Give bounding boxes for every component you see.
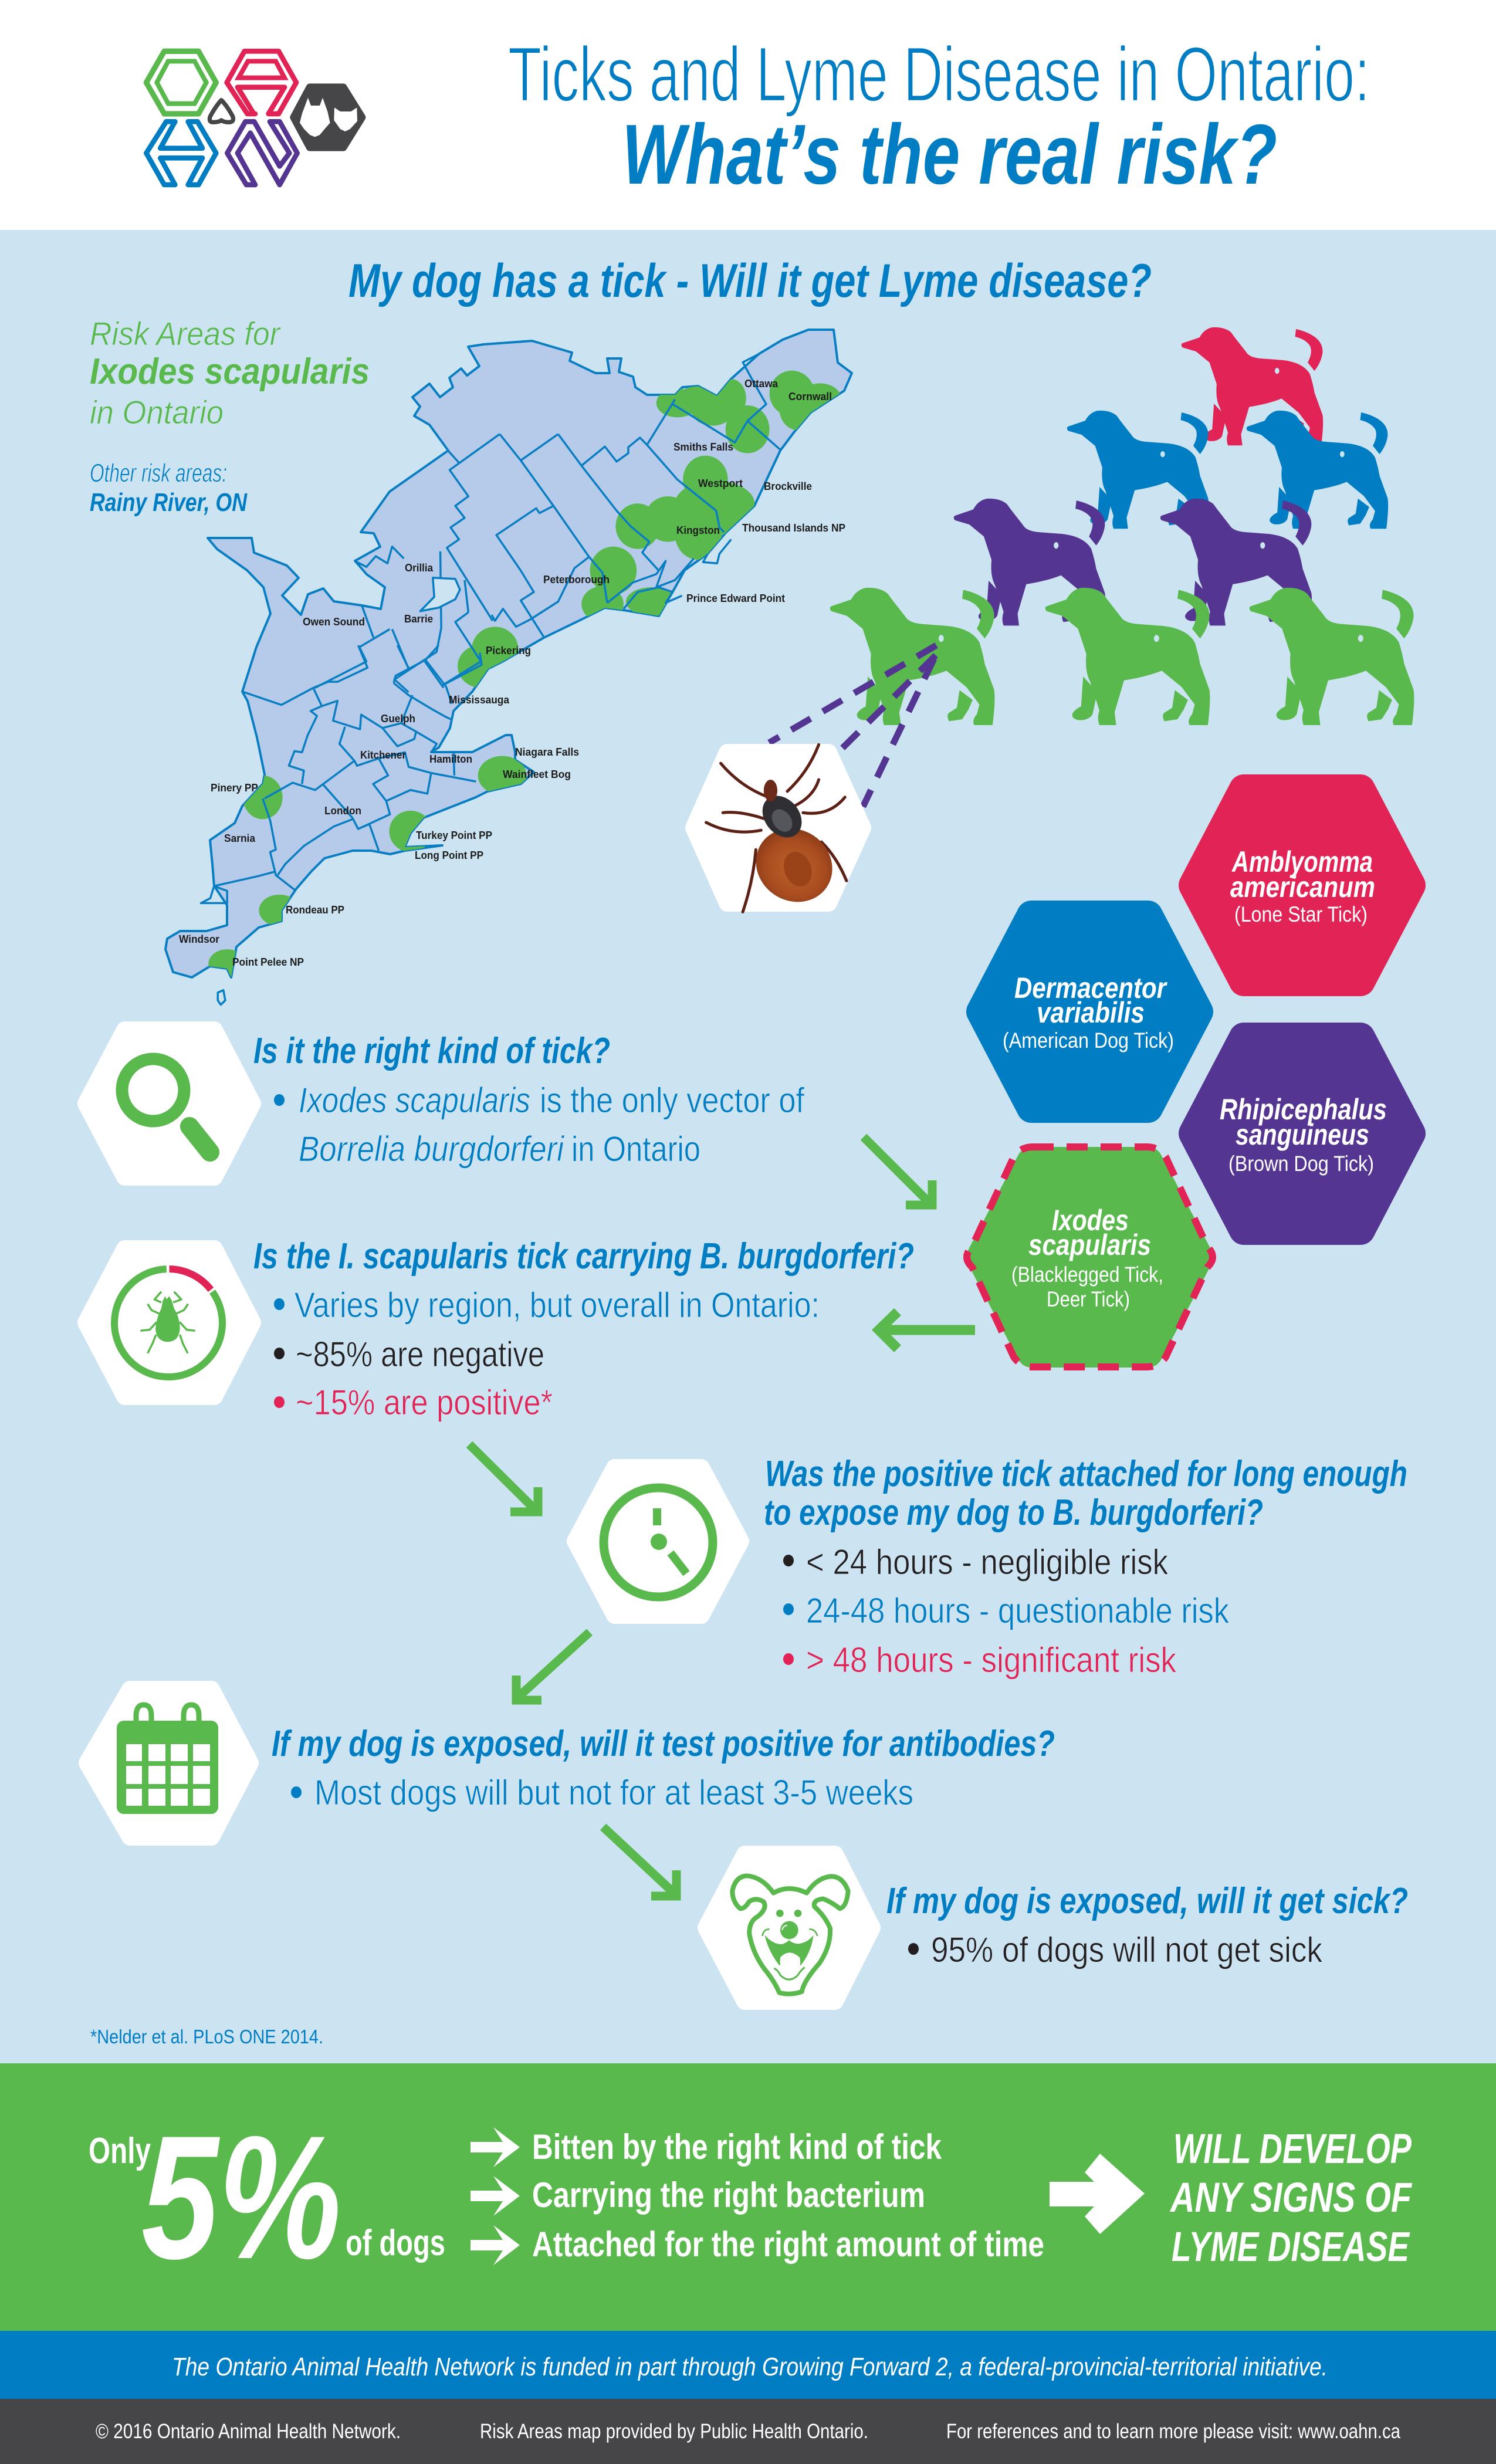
map: place labels: Wainfleet Bog xyxy=(503,769,571,780)
panel: dark footer xyxy=(0,2399,1496,2464)
species hexagon: Amblyomma americanum: americanum xyxy=(1230,871,1375,903)
panel: blue funding band xyxy=(0,2331,1496,2399)
text: right kind of tick: in Ontario xyxy=(571,1129,700,1169)
text: antibodies: Most dogs will but not for at least 3-5 weeks xyxy=(314,1773,913,1812)
criteria list: Attached for the right amount of time xyxy=(532,2225,1044,2264)
map legend text: Ixodes scapularis xyxy=(90,351,370,392)
arrow: attached xyxy=(471,2225,520,2265)
dog: purple right xyxy=(1160,499,1312,625)
species hexagon: Ixodes scapularis with dashed border: Ixodes xyxy=(1052,1204,1129,1237)
dog: green left xyxy=(830,588,994,725)
map: place labels: Orillia xyxy=(405,562,434,574)
panel: green summary band xyxy=(0,2063,1496,2331)
arrow: step 2 to step 3 xyxy=(469,1444,538,1512)
text: tick carrying bacterium: ~15% are positive* xyxy=(296,1383,553,1422)
text: antibodies: If my dog is exposed, will it test positive for antibodies? xyxy=(272,1724,1055,1764)
text: antibodies xyxy=(272,1724,1055,1812)
big stat: only 5% of dogs: 5% xyxy=(141,2099,341,2296)
background: header white xyxy=(0,0,1496,230)
map: place labels: Ottawa xyxy=(744,378,779,390)
text: right kind of tick: Is it the right kind of tick? xyxy=(253,1031,610,1071)
map: place labels: Point Pelee NP xyxy=(232,956,304,968)
conclusion text: WILL DEVELOP xyxy=(1173,2126,1412,2172)
map: county boundaries west xyxy=(201,645,482,1005)
map: place labels: Pickering xyxy=(486,645,531,656)
text: attachment time xyxy=(764,1454,1407,1680)
step 4: antibodies xyxy=(87,1690,1055,1837)
dashed lines from dog to tick xyxy=(769,645,936,807)
map: place labels: Kitchener xyxy=(360,749,406,761)
logo: OAHN hexagons xyxy=(146,51,362,185)
dog: green right xyxy=(1250,588,1414,725)
arrow: step 4 to step 5 xyxy=(603,1827,676,1896)
step 3: attachment time xyxy=(576,1454,1407,1680)
big stat: only 5% of dogs: Only xyxy=(89,2131,151,2171)
species hexagon: Amblyomma americanum: Amblyomma xyxy=(1231,845,1373,878)
panel: dark footer: For references and to learn more please visit: www.oahn.ca xyxy=(946,2420,1400,2443)
text: tick carrying bacterium xyxy=(253,1236,914,1422)
map: place labels: Turkey Point PP xyxy=(416,830,492,841)
title: What’s the real risk? xyxy=(622,107,1277,202)
species hexagon: Dermacentor variabilis xyxy=(981,915,1199,1108)
dog: red xyxy=(1182,327,1323,445)
map: place labels: Sarnia xyxy=(224,832,256,844)
map: place labels: Mississauga xyxy=(449,694,510,706)
map: place labels: Thousand Islands NP xyxy=(742,522,845,534)
criteria list: Carrying the right bacterium xyxy=(532,2175,925,2215)
big stat: only 5% of dogs: of dogs xyxy=(346,2223,445,2263)
criteria list: Bitten by the right kind of tick xyxy=(532,2127,942,2167)
arrow: step 3 to step 4 xyxy=(516,1632,590,1700)
species hexagon: Ixodes scapularis with dashed border: (Blacklegged Tick, xyxy=(1011,1263,1163,1287)
species hexagon: Ixodes scapularis with dashed border xyxy=(967,1147,1213,1367)
map: place labels: Brockville xyxy=(764,480,812,492)
map: place labels: London xyxy=(324,805,361,817)
map legend text: Risk Areas for xyxy=(90,315,281,352)
panel: dark footer: Risk Areas map provided by Public Health Ontario. xyxy=(480,2420,868,2443)
map: place labels: Windsor xyxy=(179,933,219,945)
conclusion text: ANY SIGNS OF xyxy=(1169,2175,1412,2221)
arrow: step 1 to Ixodes hexagon xyxy=(864,1137,932,1205)
map legend text: in Ontario xyxy=(90,394,224,431)
conclusion text: LYME DISEASE xyxy=(1172,2224,1410,2270)
icon: tick photo in white hexagon xyxy=(694,744,862,912)
species hexagon: Ixodes scapularis with dashed border: Deer Tick) xyxy=(1047,1287,1130,1311)
map: place labels: Owen Sound xyxy=(303,616,365,628)
map: place labels: Barrie xyxy=(404,613,433,625)
dog: blue right xyxy=(1247,411,1388,529)
icon: magnifying glass xyxy=(86,1030,252,1177)
icon: tick in percentage ring xyxy=(86,1249,252,1396)
dog: blue left xyxy=(1067,411,1209,529)
map: place labels: Prince Edward Point xyxy=(686,593,785,604)
dogs: pyramid of eight dog silhouettes xyxy=(830,327,1414,725)
panel: dark footer: © 2016 Ontario Animal Health Network. xyxy=(96,2420,401,2443)
map land xyxy=(165,330,852,977)
map: Southern Ontario risk areas xyxy=(165,330,852,1005)
map: place labels: Rondeau PP xyxy=(286,904,344,916)
map: place labels: Westport xyxy=(698,478,743,489)
text: attachment time: 24-48 hours - questionable risk xyxy=(806,1591,1230,1630)
text: attachment time: > 48 hours - significant risk xyxy=(806,1640,1177,1680)
criteria list xyxy=(532,2127,1044,2264)
text: right kind of tick xyxy=(253,1031,804,1169)
map legend text: Other risk areas: xyxy=(90,459,227,488)
heading: main question: My dog has a tick - Will it get Lyme disease? xyxy=(348,255,1152,307)
map: place labels: Niagara Falls xyxy=(515,746,579,758)
text: gets sick: 95% of dogs will not get sick xyxy=(931,1930,1323,1969)
dog: green middle xyxy=(1045,588,1210,725)
footnote: *Nelder et al. PLoS ONE 2014. xyxy=(90,2026,323,2047)
map legend text: Rainy River, ON xyxy=(90,488,248,517)
text: tick carrying bacterium: ~85% are negative xyxy=(296,1335,544,1374)
species hexagon: Rhipicephalus sanguineus xyxy=(1193,1037,1411,1230)
icon: happy dog face xyxy=(706,1854,872,2001)
map: place labels: Guelph xyxy=(381,713,415,725)
map: place labels: Kingston xyxy=(676,524,720,536)
step 2: tick carrying bacterium xyxy=(86,1236,914,1422)
species hexagon: Amblyomma americanum xyxy=(1193,789,1411,981)
species hexagon: Rhipicephalus sanguineus: Rhipicephalus xyxy=(1220,1093,1387,1126)
text: right kind of tick: Ixodes scapularis xyxy=(299,1081,530,1120)
text: gets sick xyxy=(886,1881,1408,1969)
text: right kind of tick: Borrelia burgdorferi xyxy=(299,1129,564,1169)
arrow: large xyxy=(1050,2154,1145,2234)
map: place labels: Pinery PP xyxy=(211,782,258,794)
step 1: right kind of tick xyxy=(86,1030,804,1177)
text: tick carrying bacterium: Is the I. scapularis tick carrying B. burgdorferi? xyxy=(253,1236,914,1277)
arrow: bitten xyxy=(471,2127,520,2167)
species hexagon: Dermacentor variabilis: (American Dog Tick) xyxy=(1003,1028,1174,1052)
text: attachment time: to expose my dog to B. burgdorferi? xyxy=(764,1492,1263,1533)
text: attachment time: < 24 hours - negligible risk xyxy=(806,1542,1169,1582)
species hexagon: Rhipicephalus sanguineus: (Brown Dog Tick) xyxy=(1228,1152,1374,1176)
species hexagon: Rhipicephalus sanguineus: sanguineus xyxy=(1236,1118,1369,1151)
species hexagon: Amblyomma americanum: (Lone Star Tick) xyxy=(1234,902,1368,926)
icon: calendar xyxy=(87,1690,250,1837)
map: place labels: Cornwall xyxy=(788,391,832,402)
map: place labels: Long Point PP xyxy=(415,849,483,861)
species hexagon: Dermacentor variabilis: variabilis xyxy=(1037,996,1145,1029)
arrow: Ixodes hexagon to step 2 xyxy=(879,1312,975,1349)
map: place labels: Peterborough xyxy=(543,574,610,585)
background: main light blue panel xyxy=(0,230,1496,2063)
map: place labels xyxy=(179,378,845,968)
title xyxy=(508,31,1370,202)
map: place labels: Smiths Falls xyxy=(673,441,733,453)
icon: clock xyxy=(576,1468,740,1615)
conclusion text xyxy=(1169,2126,1412,2270)
species hexagon: Ixodes scapularis with dashed border: scapularis xyxy=(1028,1228,1151,1261)
species hexagon: Dermacentor variabilis: Dermacentor xyxy=(1014,972,1167,1004)
map: place labels: Hamilton xyxy=(429,753,472,765)
map: county boundaries east xyxy=(315,354,780,692)
map legend text xyxy=(90,315,370,517)
arrow: carrying xyxy=(471,2176,520,2216)
dog: purple left xyxy=(954,499,1105,625)
text: right kind of tick: is the only vector of xyxy=(540,1081,804,1120)
map: green risk zones xyxy=(208,371,841,979)
step 5: gets sick xyxy=(706,1854,1408,2001)
text: tick carrying bacterium: Varies by region, but overall in Ontario: xyxy=(295,1285,820,1325)
